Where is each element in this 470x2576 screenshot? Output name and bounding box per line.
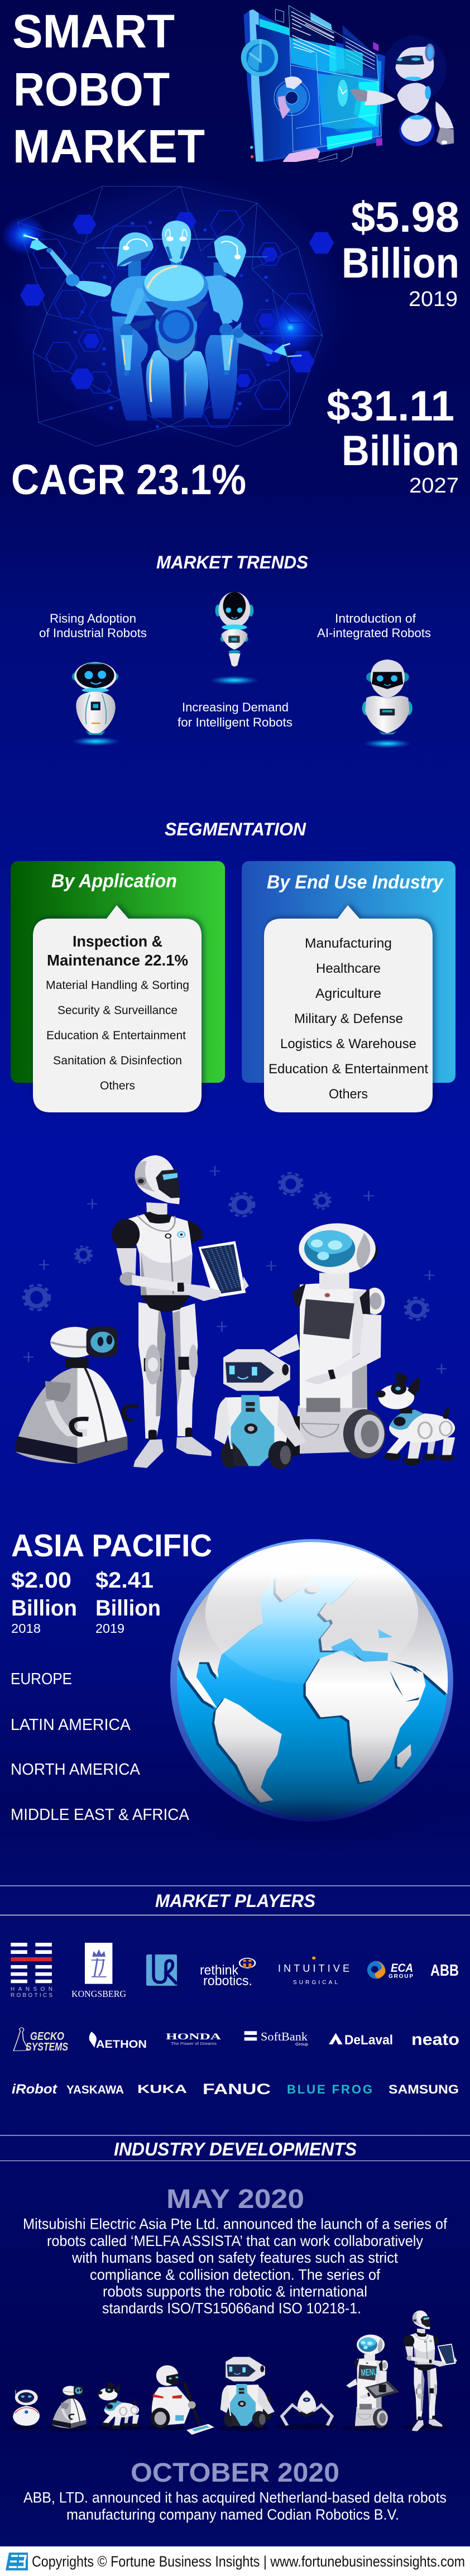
heading: market players: MARKET PLAYERS: [155, 1891, 316, 1911]
legs: [146, 350, 172, 418]
Aethon: AETHON: [96, 2039, 147, 2051]
list: industries: Agriculture: [315, 986, 381, 1001]
card heading: By Application: [51, 871, 177, 892]
logo: ECA swirl: [367, 1961, 385, 1979]
icon: centre robot: [209, 592, 260, 685]
logo: rethink icon: [239, 1958, 255, 1968]
trend: AI integrated: Introduction of: [335, 611, 416, 625]
market size 2027: [327, 383, 459, 498]
development: October 2020: ABB, LTD. announced it has acquired Netherland-based delta robots: [23, 2489, 447, 2506]
tray: [365, 2381, 399, 2398]
clock: [241, 39, 278, 77]
KUKA: KUKA: [137, 2083, 187, 2096]
development: October 2020: [23, 2458, 447, 2523]
title: SMART: [12, 5, 175, 58]
screen frame: [244, 9, 385, 162]
market size 2019: 2019: [409, 288, 458, 311]
Gecko Systems: [26, 2030, 69, 2053]
ECA Group: [389, 1962, 413, 1980]
Gecko Systems: GECKO: [30, 2030, 64, 2043]
hips: [157, 334, 196, 361]
other regions list: MIDDLE EAST & AFRICA: [11, 1806, 189, 1824]
Honda: [166, 2032, 222, 2046]
region: Asia Pacific: [11, 1528, 212, 1636]
Kongsberg: KONGSBERG: [71, 1989, 126, 1999]
panel: by application: [11, 861, 225, 1112]
robot: round (reused): [51, 2386, 90, 2428]
robot: tall humanoid (reused): [404, 2310, 457, 2431]
list: applications: [46, 933, 189, 1092]
region: Asia Pacific: Billion: [95, 1596, 161, 1621]
Honda: The Power of Dreams: [171, 2042, 217, 2046]
centre robot: [120, 221, 234, 418]
logo: Kongsberg crest: [85, 1943, 112, 1984]
data panel: [288, 6, 336, 59]
region: Asia Pacific: ASIA PACIFIC: [11, 1528, 212, 1564]
list: applications: Sanitation & Disinfection: [53, 1054, 182, 1067]
region: Asia Pacific: 2019: [95, 1621, 124, 1636]
list: applications: Maintenance 22.1%: [47, 952, 188, 969]
heading: industry developments: INDUSTRY DEVELOPMENTS: [114, 2139, 357, 2159]
panel: by end use industry: [242, 861, 455, 1112]
Yaskawa: YASKAWA: [66, 2083, 124, 2096]
trend: AI integrated: AI-integrated Robots: [317, 626, 431, 640]
logo: DeLaval mark: [329, 2033, 343, 2044]
list: applications: Others: [100, 1079, 135, 1092]
robot: tiny white: [13, 2389, 40, 2426]
card heading: By End Use Industry: [267, 872, 444, 893]
illustration: robot touching holographic screen: [241, 6, 454, 162]
development: May 2020: compliance & collision detection. The series of: [90, 2266, 381, 2283]
icon: right robot: [362, 659, 413, 748]
Gecko Systems: SYSTEMS: [26, 2041, 69, 2053]
market size 2019: Billion: [342, 240, 459, 287]
logo shapes: [11, 1943, 385, 2051]
glowing panels: [317, 74, 378, 130]
region: Asia Pacific: $2.41: [95, 1568, 154, 1593]
development: May 2020: Mitsubishi Electric Asia Pte Ltd. announced the launch of a series of: [23, 2216, 448, 2233]
ground shadows: [10, 2424, 449, 2431]
globe: [170, 1539, 453, 1835]
other regions list: [11, 1670, 189, 1824]
robot: tall humanoid with tablet: [112, 1155, 249, 1468]
trend: intelligent robots: [178, 700, 292, 729]
screen surface: [256, 24, 381, 160]
belly: [155, 305, 197, 347]
ABB: ABB: [430, 1962, 459, 1980]
region: Asia Pacific: $2.00: [11, 1568, 71, 1593]
icon boxes: [373, 42, 378, 51]
development: October 2020: manufacturing company named Codian Robotics B.V.: [66, 2506, 399, 2523]
list: industries: Logistics & Warehouse: [280, 1036, 416, 1052]
ring chart: [274, 80, 309, 116]
seas: [331, 1629, 420, 1702]
bubble: [264, 905, 433, 1112]
list: applications: Education & Entertainment: [46, 1029, 186, 1042]
list: industries: Others: [329, 1087, 368, 1102]
contact shadow: [156, 1798, 468, 1852]
list: industries: Military & Defense: [294, 1011, 403, 1026]
Hanson Robotics: [11, 1986, 52, 1999]
region: Asia Pacific: 2018: [11, 1621, 41, 1636]
Samsung: SAMSUNG: [389, 2082, 459, 2096]
logo: Gecko figure: [13, 2028, 28, 2051]
robot: waiter with menu (reused body): [346, 2335, 399, 2428]
trend: rising adoption: Rising Adoption: [50, 611, 136, 625]
chest: [145, 302, 208, 322]
iRobot: iRobot: [12, 2082, 57, 2097]
list: industries: Healthcare: [316, 961, 381, 976]
outer rim: [170, 1539, 453, 1822]
robot: large service: [270, 1224, 385, 1459]
market size 2019: [342, 194, 459, 311]
pink pill: [283, 148, 320, 162]
trend: rising adoption: of Industrial Robots: [39, 626, 147, 640]
Honda: HONDA: [166, 2032, 222, 2042]
development: May 2020: robots supports the robotic & international: [103, 2283, 367, 2300]
development: May 2020: robots called ‘MELFA ASSISTA’ that can work collaboratively: [47, 2233, 424, 2249]
logo: Hanson bars: [11, 1943, 52, 1983]
continents: [177, 1571, 459, 1803]
ECA Group: GROUP: [389, 1973, 413, 1980]
Intuitive Surgical: [278, 1963, 349, 1986]
logo: UR: [146, 1954, 177, 1986]
arms: [124, 288, 145, 324]
footer: [0, 2546, 470, 2576]
SoftBank: Group: [295, 2043, 308, 2047]
title: ROBOT: [13, 63, 170, 116]
particles: [73, 221, 270, 428]
indicator lights: [250, 146, 253, 149]
development: May 2020: with humans based on safety features such as strict: [71, 2249, 399, 2266]
mesh lines: [17, 186, 323, 447]
robot: dog: [376, 1373, 455, 1466]
development: May 2020: standards ISO/TS15066and ISO 10218-1.: [102, 2300, 361, 2316]
card background: [11, 861, 225, 1083]
right back robot: [205, 235, 301, 419]
market size 2027: Billion: [342, 427, 459, 475]
title: MARKET: [13, 120, 205, 173]
logo: SoftBank bars: [244, 2031, 257, 2040]
Rethink Robotics: [200, 1963, 252, 1989]
development: October 2020: OCTOBER 2020: [131, 2458, 339, 2488]
trend: rising adoption: [39, 611, 147, 640]
list: applications: Security & Surveillance: [57, 1003, 178, 1017]
market size 2019: $5.98: [351, 194, 459, 241]
CAGR: CAGR 23.1%: [11, 456, 246, 504]
robot: small blue chest: [214, 1349, 306, 1469]
logo: Intuitive dot: [312, 1957, 315, 1960]
title: [12, 5, 205, 173]
FANUC: FANUC: [203, 2081, 271, 2097]
footer bar: [0, 2546, 470, 2576]
robot: dog (reused): [97, 2382, 139, 2429]
icon: left robot: [71, 662, 121, 746]
logo: Aethon mark: [89, 2032, 97, 2048]
heading: market trends: MARKET TRENDS: [156, 552, 309, 572]
Blue Frog: BLUE FROG: [287, 2082, 372, 2096]
glow backdrop: [6, 175, 348, 443]
development: May 2020: MAY 2020: [166, 2185, 304, 2214]
Rethink Robotics: rethink: [200, 1963, 239, 1978]
other regions list: NORTH AMERICA: [11, 1761, 140, 1779]
trend robots: [71, 592, 413, 748]
robot: spider: [282, 2390, 332, 2425]
other regions list: LATIN AMERICA: [11, 1716, 131, 1734]
illustration: group of white robots: [15, 1155, 455, 1469]
DeLaval: DeLaval: [344, 2033, 393, 2048]
market size 2027: 2027: [409, 474, 459, 498]
market size 2027: $31.11: [327, 383, 454, 430]
Rethink Robotics: robotics.: [203, 1973, 252, 1989]
list: industries: Manufacturing: [305, 936, 392, 951]
card background: [242, 861, 455, 1083]
ocean: [177, 1545, 448, 1818]
gloss: [205, 1542, 418, 1684]
light streaks: [96, 239, 267, 257]
robot: small blue chest (reused): [220, 2357, 275, 2427]
SoftBank: SoftBank: [261, 2030, 308, 2043]
region: Asia Pacific: Billion: [11, 1596, 77, 1621]
menu text: MENU: [361, 2367, 378, 2378]
robot: round bodied: [15, 1326, 138, 1464]
polar cap: [411, 1587, 435, 1622]
list: applications: Material Handling & Sorting: [46, 978, 189, 992]
left back robot: [25, 232, 156, 420]
ECA Group: ECA: [391, 1962, 413, 1975]
second panel: [342, 25, 378, 79]
trend: intelligent robots: for Intelligent Robots: [178, 715, 292, 729]
logo names: [11, 1962, 459, 2097]
list: industries: [268, 936, 428, 1102]
Intuitive Surgical: INTUITIVE: [278, 1963, 349, 1974]
list: applications: Inspection &: [73, 933, 162, 950]
Hanson Robotics: HANSON: [11, 1986, 52, 1992]
other regions list: EUROPE: [11, 1670, 72, 1688]
heading: segmentation: SEGMENTATION: [165, 819, 306, 839]
list: industries: Education & Entertainment: [268, 1062, 428, 1077]
icon: Fortune Business Insights logo: [6, 2553, 28, 2570]
hexagon outlines: [33, 211, 315, 427]
gears and plus marks: [23, 1166, 447, 1374]
Hanson Robotics: ROBOTICS: [11, 1992, 52, 1999]
Intuitive Surgical: SURGICAL: [293, 1980, 338, 1986]
trend: AI integrated: [317, 611, 431, 640]
neato: neato: [411, 2030, 459, 2049]
development: May 2020: [23, 2185, 448, 2316]
hexagons: [20, 212, 334, 389]
robot: [350, 35, 454, 146]
bubble: [33, 905, 202, 1112]
illustration: blue robot trio with mesh: [2, 175, 348, 447]
trend: intelligent robots: Increasing Demand: [182, 700, 289, 714]
robot: mop cleaner: [151, 2365, 214, 2435]
robot line-up: [10, 2310, 457, 2435]
